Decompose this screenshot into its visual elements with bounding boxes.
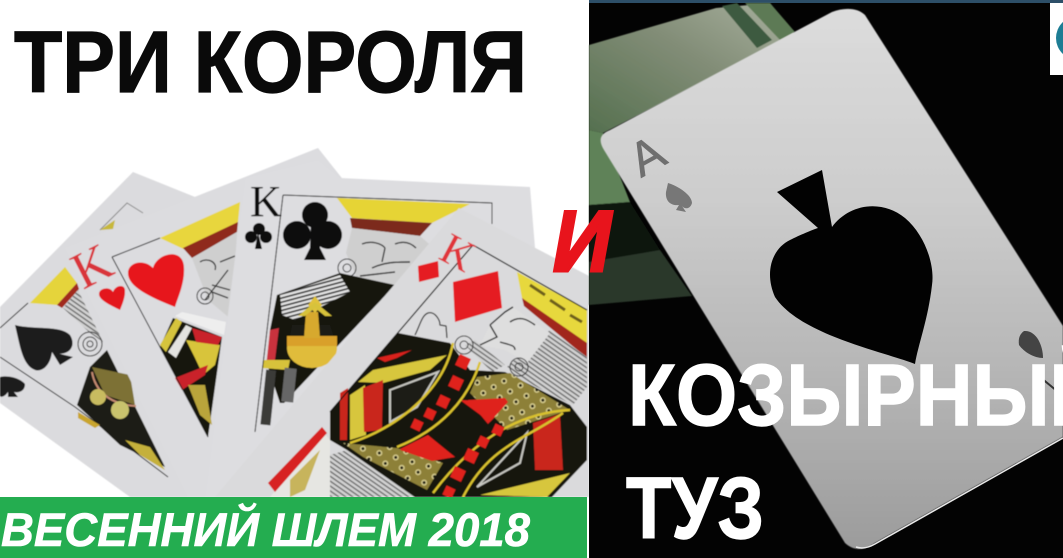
ace letter: A: [621, 126, 674, 188]
orb: [287, 296, 337, 368]
face: king of diamonds: [480, 307, 550, 363]
small diamond pip: [418, 261, 439, 282]
lower small spade: [1019, 331, 1043, 358]
spade cutout: [770, 170, 933, 364]
robe art: [330, 333, 587, 499]
spade pip: [15, 325, 73, 370]
small spade: [0, 376, 25, 397]
lower beard: [330, 450, 415, 497]
small spade: [666, 183, 692, 212]
collar: [175, 312, 226, 335]
green banner: [0, 497, 587, 558]
banner text: ВЕСЕННИЙ ШЛЕМ 2018: [1, 503, 531, 556]
panel: ace of spades: [589, 0, 1063, 558]
card: king of clubs: [205, 160, 536, 497]
heart pip: [128, 254, 184, 307]
small club pip: [245, 223, 272, 249]
letter K red: K: [432, 224, 484, 282]
card: king of spades: [0, 172, 210, 497]
title: ТРИ КОРОЛЯ: [14, 14, 527, 111]
club pip: [283, 202, 342, 260]
beard: [507, 330, 587, 405]
small heart pip: [99, 286, 125, 310]
bottle: [589, 3, 795, 305]
diamond pip: [453, 271, 502, 322]
spiral ornament: [78, 332, 102, 356]
letter K black: K: [250, 177, 282, 226]
card: king of diamonds: [215, 208, 589, 499]
letter K red: K: [63, 233, 122, 301]
metal bottle-opener card: [601, 9, 1063, 549]
logo fragment: [1050, 3, 1063, 75]
trump ace text second line: ТУЗ: [626, 460, 764, 557]
conjunction letter: И: [553, 194, 613, 290]
playing cards fan: [0, 148, 589, 499]
panel: three kings: [0, 0, 589, 558]
lower art of king of spades: [77, 350, 165, 470]
card: king of hearts: [63, 148, 345, 497]
lower corner ornament: [270, 432, 330, 497]
hand: [415, 313, 447, 338]
card edge highlight: [856, 438, 1063, 548]
